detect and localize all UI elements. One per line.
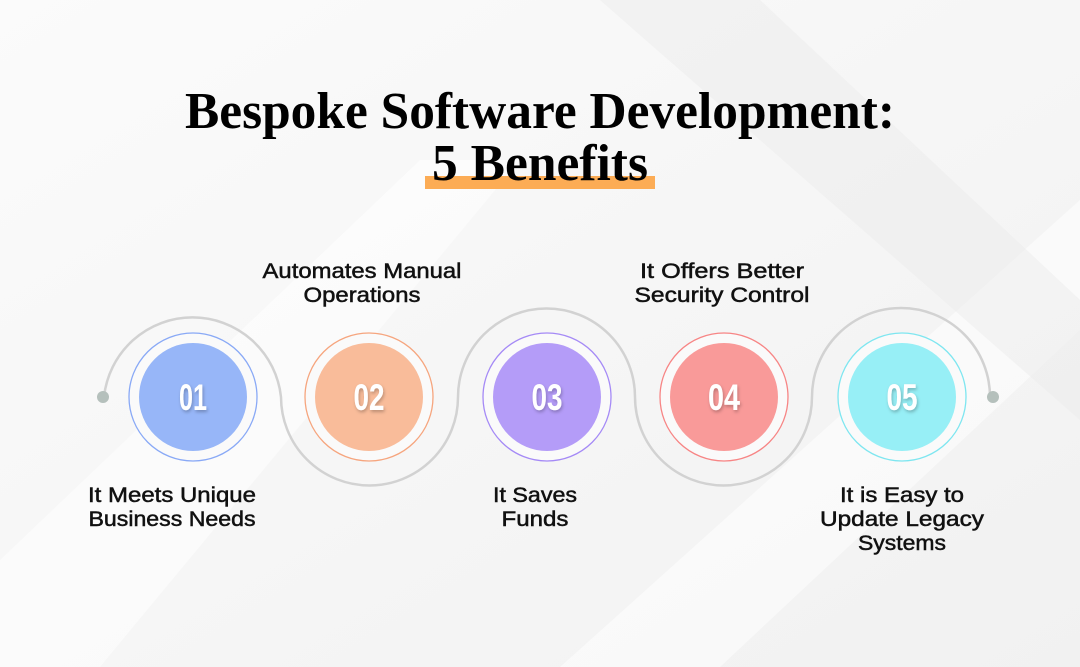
label 02: Automates Manual [262,260,462,283]
step 01 circle [129,333,257,461]
step 05 circle [838,333,966,461]
label 03: It Saves [493,484,577,507]
label 05: Systems [858,532,946,555]
step 03 circle: 03 [532,377,562,418]
step 01 circle: 01 [179,377,207,418]
step 02 circle [305,333,433,461]
label 01: Business Needs [88,508,256,531]
title: 5 Benefits [432,135,648,192]
label 01: It Meets Unique [88,484,256,507]
step 05 circle: 05 [886,377,918,418]
highlight bar [425,176,655,189]
label 05: Update Legacy [820,508,985,531]
label 03: Funds [502,508,568,531]
title: Bespoke Software Development: [185,83,895,140]
label 02: Operations [304,284,420,307]
label 05: It is Easy to [840,484,964,507]
label 04: It Offers Better [640,260,804,283]
label 04: Security Control [634,284,810,307]
step 02 circle: 02 [354,377,384,418]
step 03 circle [483,333,611,461]
title [185,83,895,192]
step 04 circle: 04 [708,377,740,418]
step 04 circle [660,333,788,461]
wavy connector line [97,308,999,485]
